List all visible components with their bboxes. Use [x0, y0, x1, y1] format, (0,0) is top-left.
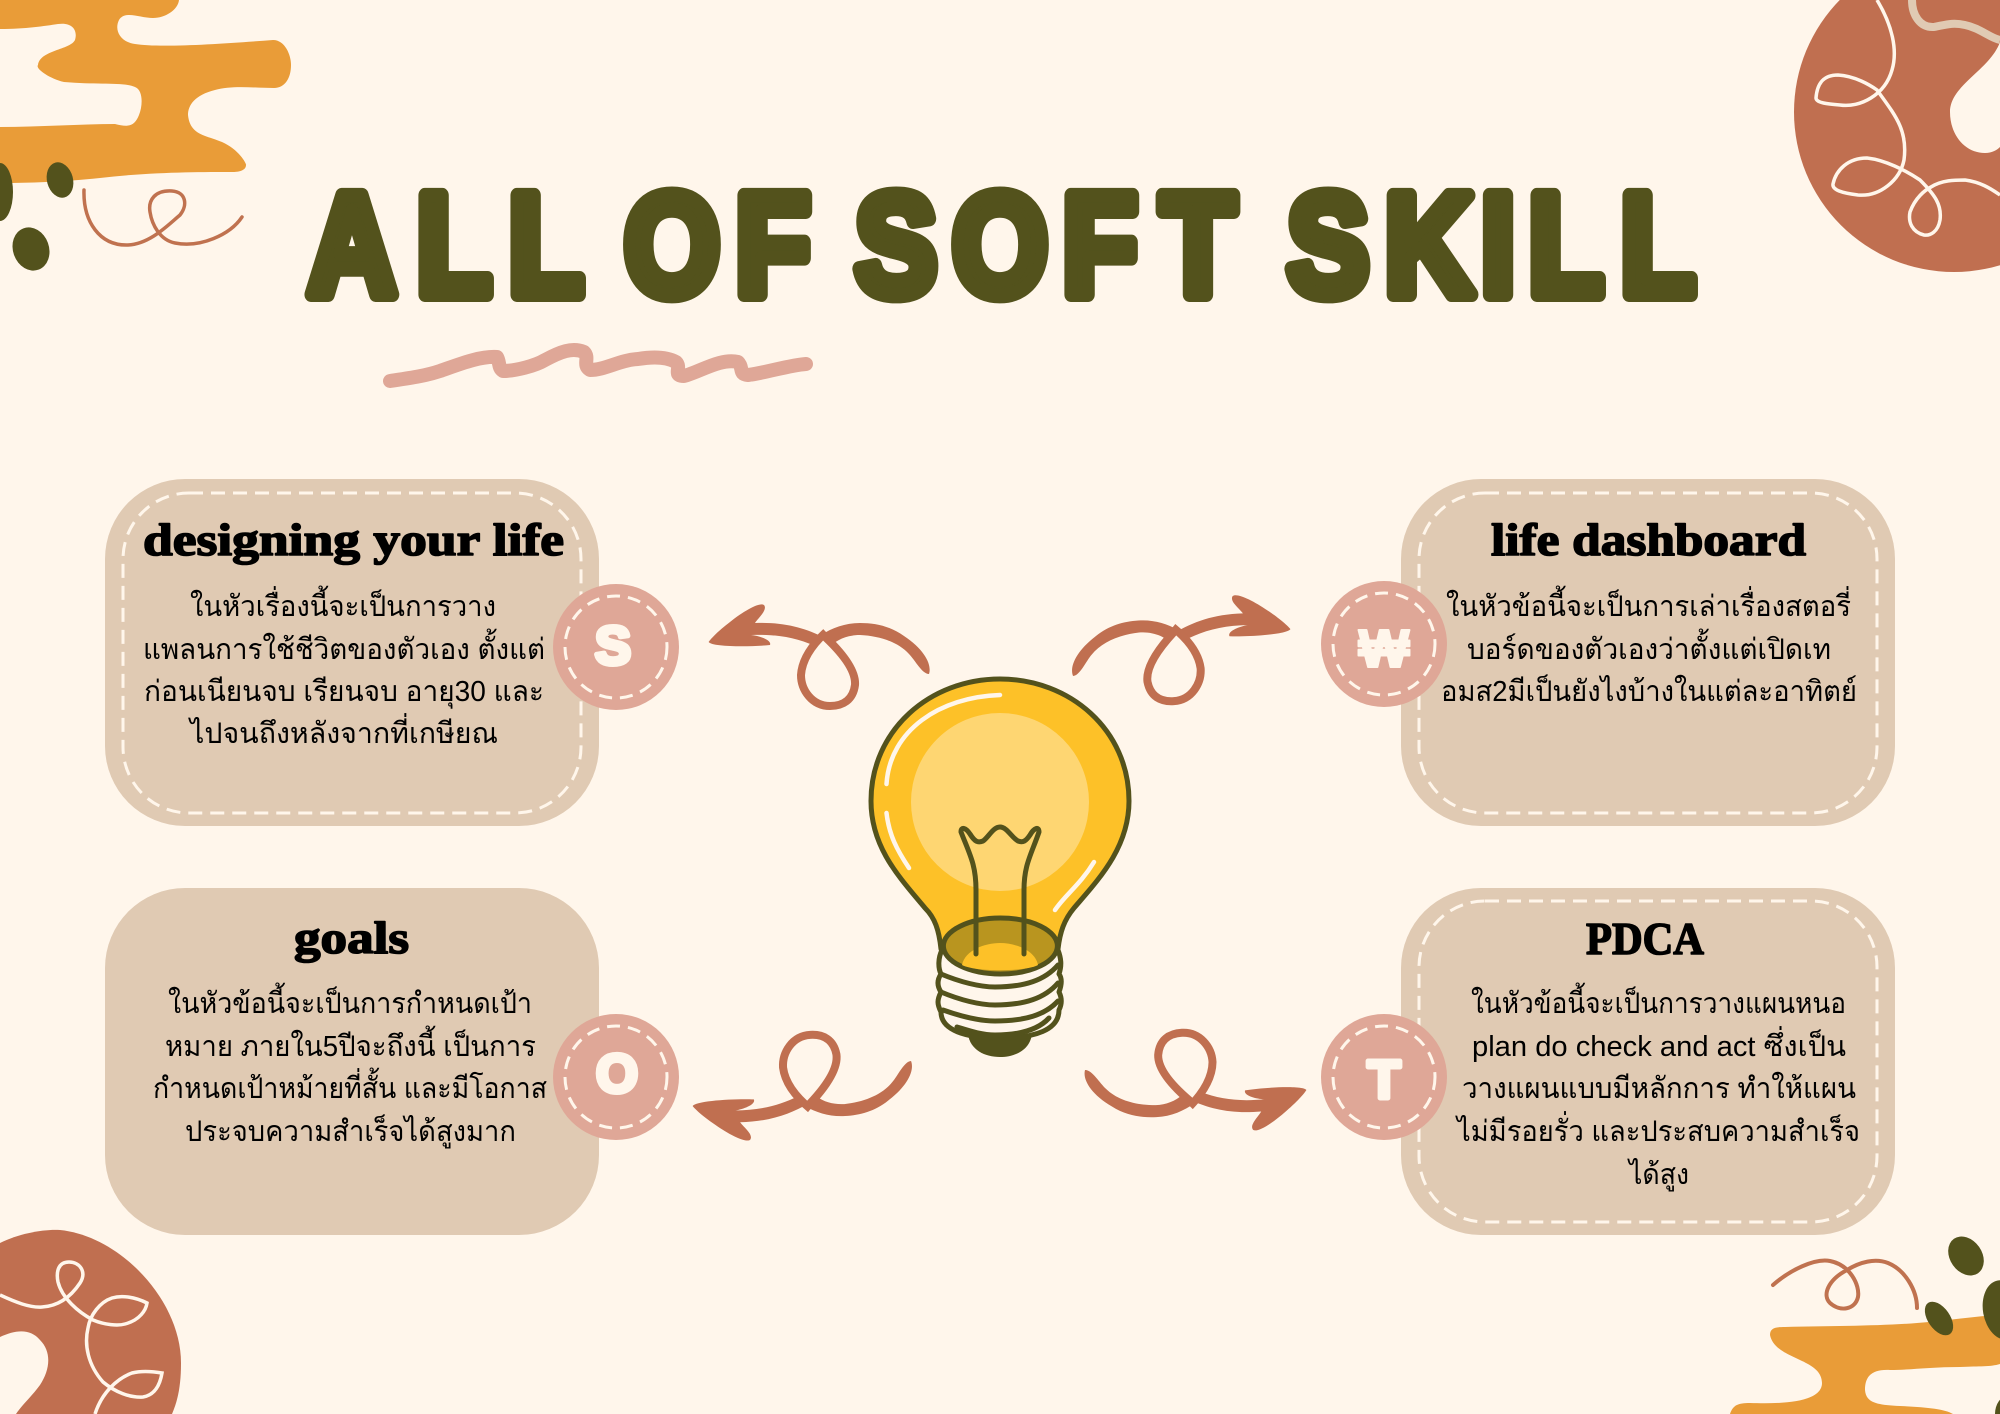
dashed inner border	[1419, 493, 1877, 813]
cut-out shape	[0, 1331, 48, 1414]
title: ALL OF SOFT SKILL	[308, 165, 1695, 326]
heading: goals	[294, 912, 409, 963]
cut-out shape	[1950, 42, 2000, 153]
panel background	[105, 888, 599, 1235]
white curl top-right	[1816, 0, 2000, 235]
body text: หมาย ภายใน5ปีจะถึงนี้ เป็นการ	[165, 1025, 536, 1063]
heading: designing your life	[143, 514, 564, 565]
panel background	[105, 479, 599, 826]
screw threads	[941, 965, 1058, 1035]
body text	[1441, 585, 1857, 708]
bulb cap	[968, 1034, 1032, 1057]
badge: T	[1321, 1014, 1447, 1140]
body text: ในหัวข้อนี้จะเป็นการวางแผนหนอ	[1471, 982, 1846, 1020]
arrow: to bottom-right panel	[1083, 1026, 1308, 1139]
badge: W	[1321, 581, 1447, 707]
body text: ได้สูง	[1627, 1157, 1689, 1192]
squiggle top-left	[84, 190, 242, 245]
body text: ในหัวข้อนี้จะเป็นการเล่าเรื่องสตอรี่	[1446, 585, 1851, 623]
body text: ในหัวเรื่องนี้จะเป็นการวาง	[190, 585, 496, 623]
panel: PDCA	[1401, 888, 1895, 1235]
icon: light bulb	[871, 679, 1129, 1057]
body text: ไม่มีรอยรั่ว และประสบความสำเร็จ	[1455, 1111, 1860, 1148]
terracotta circle	[1794, 0, 2000, 272]
filament	[961, 827, 1039, 954]
body text: แพลนการใช้ชีวิตของตัวเอง ตั้งแต่	[143, 628, 545, 666]
body text: กำหนดเป้าหม้ายที่สั้น และมีโอกาส	[153, 1067, 547, 1105]
badge: S: S	[595, 616, 631, 676]
terracotta shape	[0, 1230, 181, 1414]
screw base	[938, 950, 1061, 1038]
decoration: bottom-left circle	[0, 1230, 181, 1414]
squiggle bottom-right	[1773, 1261, 1917, 1309]
badge: O: O	[596, 1044, 638, 1104]
dashed inner border	[1419, 901, 1877, 1222]
body text: ในหัวข้อนี้จะเป็นการกำหนดเป้า	[168, 982, 532, 1020]
olive dots bottom-right	[1919, 1230, 2000, 1414]
panel: designing your life	[105, 479, 599, 826]
dashed inner border	[123, 493, 581, 813]
body text: ไปจนถึงหลังจากที่เกษียณ	[188, 713, 498, 750]
body text: ก่อนเนียนจบ เรียนจบ อายุ30 และ	[144, 676, 544, 709]
body text	[143, 585, 545, 750]
neck opening	[943, 918, 1057, 974]
tan ribbon	[1912, 0, 2000, 40]
panel: goals	[105, 888, 599, 1235]
body text: อมส2มีเป็นยังไงบ้างในแต่ละอาทิตย์	[1441, 673, 1857, 708]
orange blob top-left	[0, 0, 291, 183]
orange blob bottom-right	[1730, 1315, 2000, 1414]
glass globe	[871, 679, 1129, 949]
badge: O	[553, 1014, 679, 1140]
heading: life dashboard	[1491, 514, 1806, 565]
body text	[153, 982, 547, 1149]
decoration: bottom-right blob cluster	[1730, 1230, 2000, 1414]
body text: วางแผนแบบมีหลักการ ทำให้แผน	[1462, 1071, 1856, 1105]
decoration: top-right circle	[1794, 0, 2000, 272]
body text: บอร์ดของตัวเองว่าตั้งแต่เปิดเท	[1467, 628, 1831, 666]
decoration: top-left blob cluster	[0, 0, 291, 276]
body text	[1455, 982, 1860, 1192]
body text: ประจบความสำเร็จได้สูงมาก	[185, 1113, 516, 1149]
panel background	[1401, 888, 1895, 1235]
olive dots top-left	[0, 159, 77, 276]
title underline squiggle	[390, 350, 806, 381]
badge: S	[553, 584, 679, 710]
inner glow	[911, 713, 1089, 891]
glass highlights	[886, 695, 1094, 910]
badge: T: T	[1368, 1050, 1400, 1110]
arrow: to bottom-left panel	[689, 1029, 916, 1144]
body text: plan do check and act ซึ่งเป็น	[1472, 1026, 1846, 1063]
arrow: to top-left panel	[709, 604, 930, 706]
heading: PDCA	[1586, 913, 1704, 964]
panel: life dashboard	[1401, 479, 1895, 826]
badge: W: ₩	[1359, 619, 1410, 679]
white curl bottom-left	[0, 1262, 162, 1414]
neck inner light	[962, 943, 1038, 970]
panel background	[1401, 479, 1895, 826]
arrow: to top-right panel	[1068, 592, 1295, 708]
